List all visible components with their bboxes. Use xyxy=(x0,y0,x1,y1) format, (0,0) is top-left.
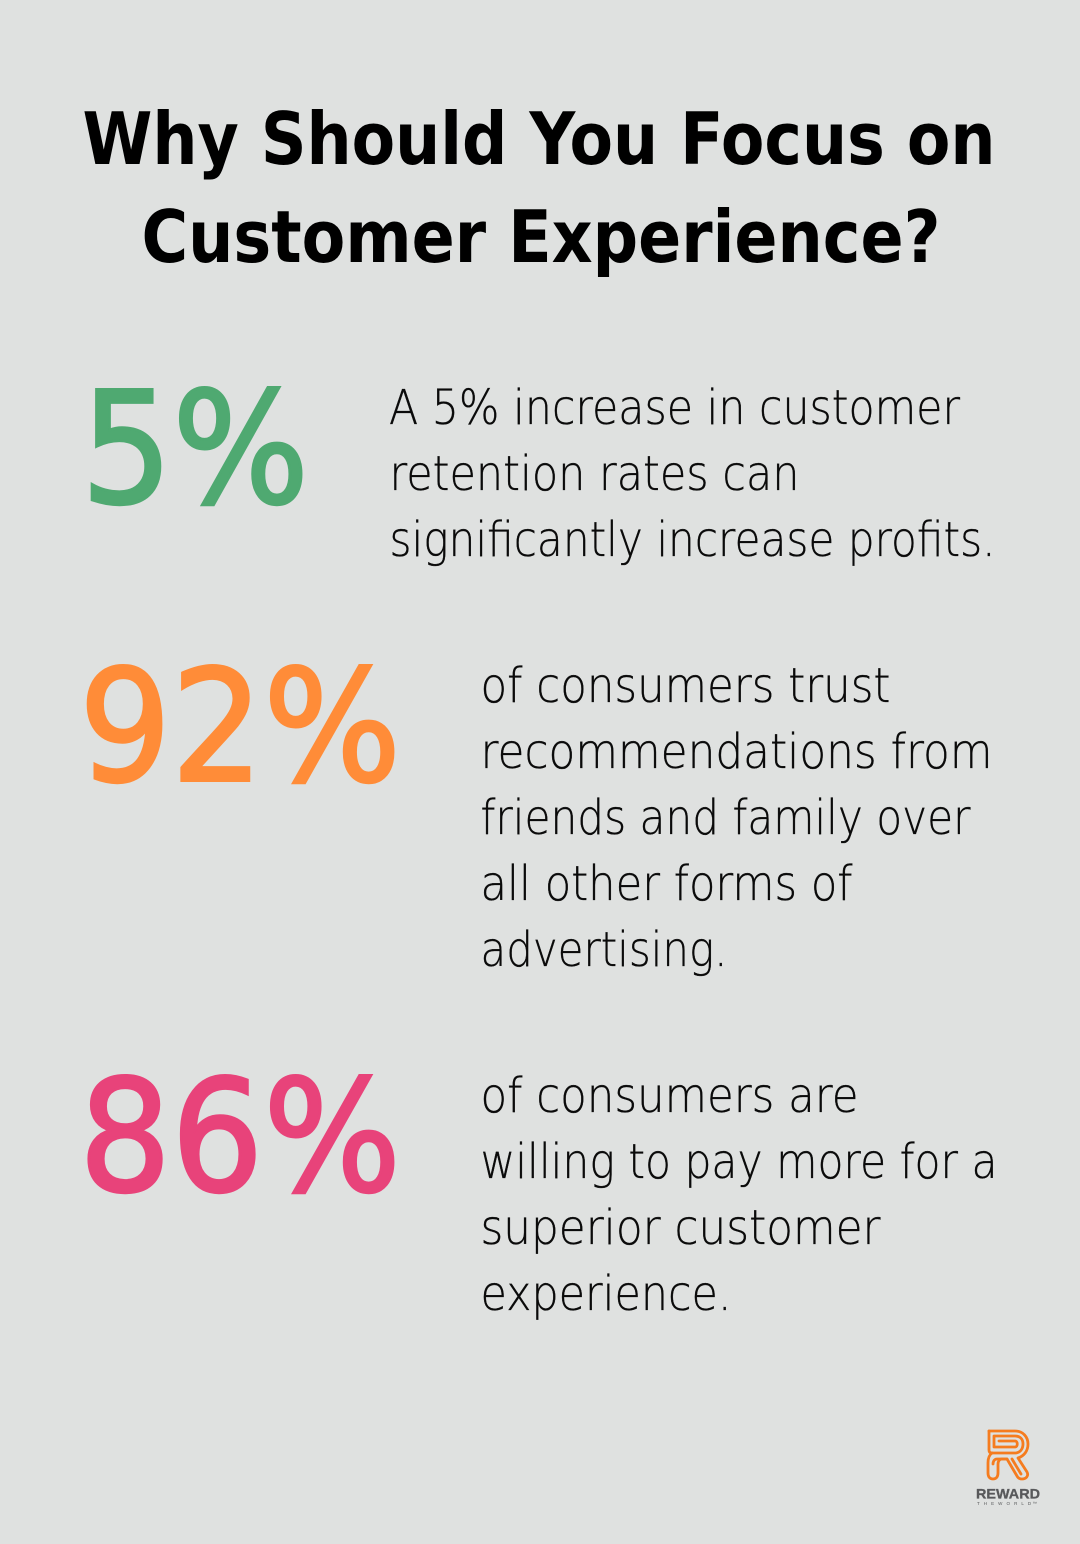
text: trust description xyxy=(480,658,992,978)
number: 5%: 5% xyxy=(81,358,309,540)
text: pay more description: of consumers are xyxy=(480,1068,858,1124)
text: pay more description: superior customer xyxy=(480,1200,881,1256)
text: trust description: recommendations from xyxy=(480,724,992,780)
text: trust description: of consumers trust xyxy=(480,658,890,714)
text: pay more description: experience. xyxy=(480,1266,732,1322)
title xyxy=(82,97,996,279)
text: pay more description: willing to pay more for a xyxy=(480,1134,998,1190)
text: trust description: advertising. xyxy=(480,922,728,978)
number: 86%: 86% xyxy=(79,1046,401,1228)
title: Customer Experience? xyxy=(142,195,940,279)
logo wordmark: REWARD xyxy=(976,1486,1040,1502)
text: retention description: significantly increase profits. xyxy=(390,512,996,568)
text: retention description: retention rates can xyxy=(390,446,800,502)
stat: 86% pay more xyxy=(79,1046,998,1322)
stat: 92% trust xyxy=(79,636,992,978)
text: retention description: A 5% increase in customer xyxy=(389,380,960,436)
number: 92%: 92% xyxy=(79,636,401,818)
logo tagline: T H E W O R L D™ xyxy=(977,1501,1037,1506)
text: trust description: all other forms of xyxy=(480,856,853,912)
icon: R mark xyxy=(988,1431,1028,1479)
logo: Reward the World xyxy=(976,1431,1040,1506)
stat: 5% retention xyxy=(81,358,996,568)
text: pay more description xyxy=(480,1068,998,1322)
text: trust description: friends and family over xyxy=(480,790,971,846)
text: retention description xyxy=(389,380,996,568)
